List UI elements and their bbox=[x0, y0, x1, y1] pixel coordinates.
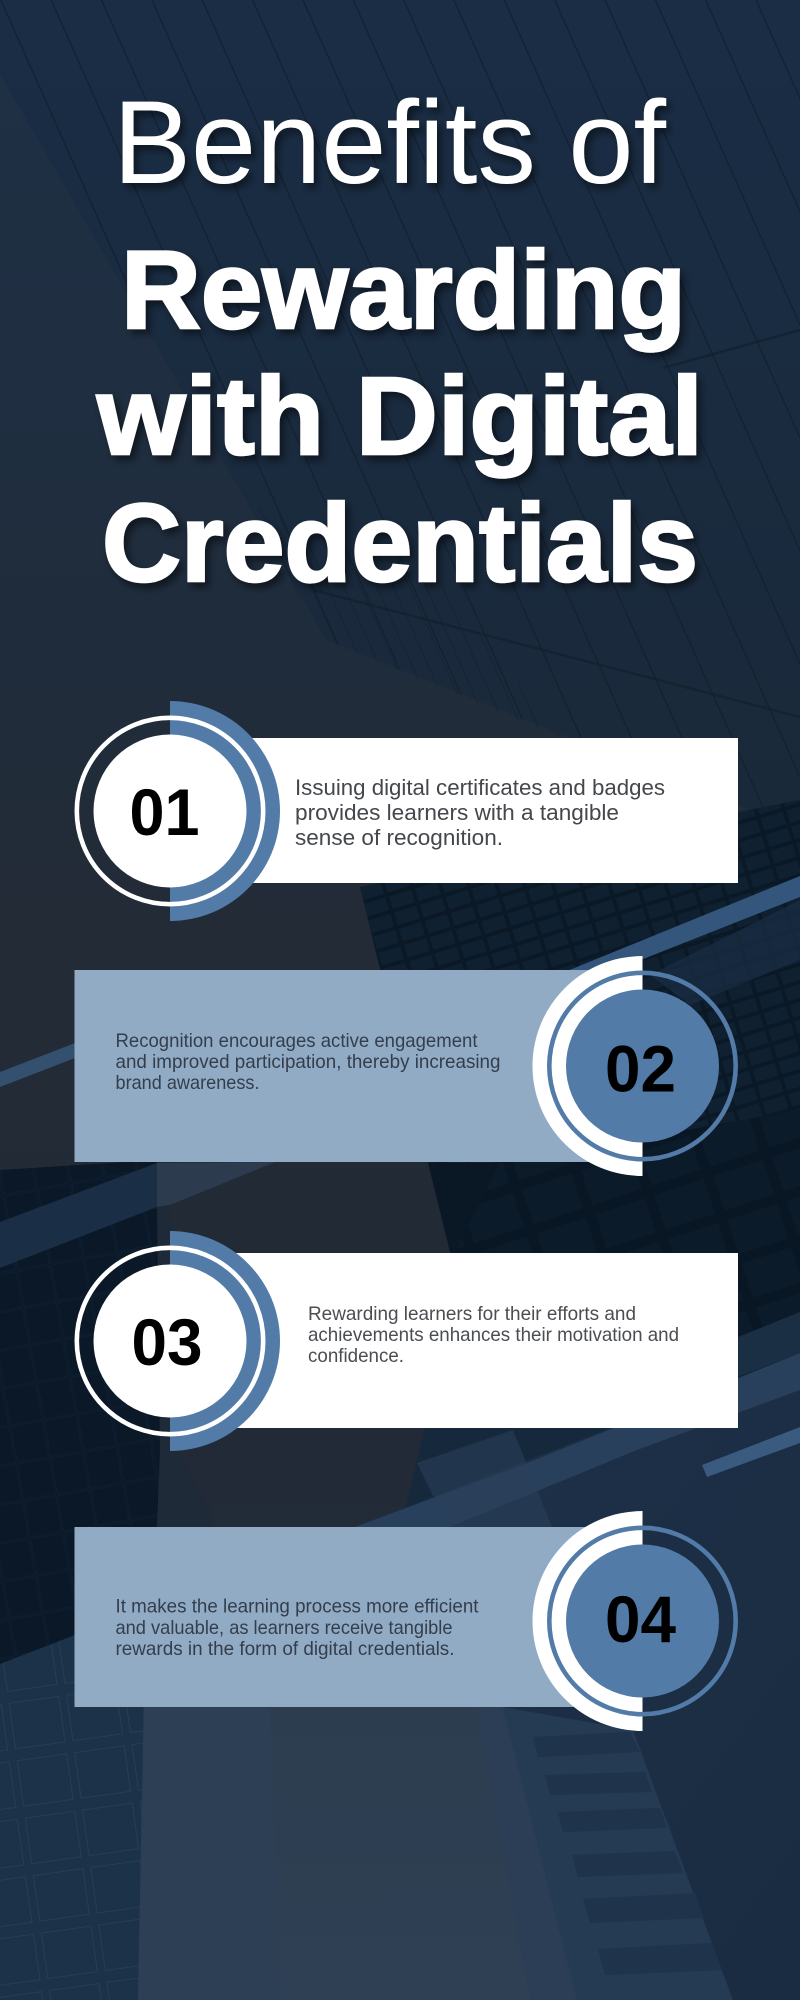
text block 01: Issuing digital certificates and badges bbox=[295, 775, 665, 800]
title line: Credentials: Credentials bbox=[102, 482, 698, 605]
text block 04 bbox=[116, 1596, 479, 1660]
icon: number badge 01 bbox=[77, 701, 280, 921]
icon: number badge 01: 01 bbox=[130, 775, 200, 849]
translucent band over sky bbox=[157, 1162, 275, 1207]
card 01 bbox=[170, 738, 738, 883]
icon: number badge 02: 02 bbox=[605, 1032, 676, 1106]
card 04 bbox=[74, 1527, 642, 1707]
panel: item 03 bbox=[77, 1231, 738, 1451]
title bbox=[96, 77, 703, 605]
title line: Rewarding: Rewarding bbox=[121, 229, 686, 352]
card 02 bbox=[74, 970, 642, 1162]
card 03 bbox=[170, 1253, 738, 1428]
text block 01: provides learners with a tangible bbox=[295, 800, 619, 825]
text block 02 bbox=[116, 1030, 500, 1094]
dark grid tower bbox=[360, 800, 800, 1540]
translucent band left bbox=[0, 1163, 157, 1268]
lower-right glass tower bbox=[355, 1355, 800, 2000]
text block 03 bbox=[308, 1303, 679, 1367]
narrow tower edge bbox=[150, 1205, 215, 1700]
title line: Benefits of: Benefits of bbox=[113, 77, 666, 209]
lighter glass corner right bbox=[650, 900, 800, 1005]
lower-left glass tower bbox=[0, 1635, 280, 2000]
icon: number badge 02 bbox=[532, 956, 736, 1176]
icon: number badge 04 bbox=[532, 1511, 736, 1731]
blue diagonal band left bbox=[0, 1043, 75, 1087]
window tower bottom right bbox=[503, 1707, 733, 2000]
upper glass tower bbox=[0, 0, 800, 830]
mid blue zone beneath panel three bbox=[400, 1428, 800, 1530]
text block 04: and valuable, as learners receive tangible bbox=[116, 1617, 452, 1639]
blue diagonal band right bbox=[545, 876, 800, 980]
text block 03: Rewarding learners for their efforts and bbox=[308, 1303, 636, 1325]
lighter band right bbox=[355, 1353, 800, 1527]
icon: number badge 04: 04 bbox=[605, 1582, 676, 1656]
text block 03: confidence. bbox=[308, 1345, 404, 1367]
panel: item 01 bbox=[77, 701, 738, 921]
text block 01 bbox=[295, 775, 665, 850]
panel: item 02 bbox=[74, 956, 736, 1176]
text block 02: and improved participation, thereby increasing bbox=[116, 1051, 500, 1073]
icon: number badge 03 bbox=[77, 1231, 280, 1451]
text block 04: It makes the learning process more efficient bbox=[116, 1596, 479, 1618]
small blue stripe bbox=[702, 1427, 800, 1477]
text block 04: rewards in the form of digital credentials. bbox=[116, 1638, 454, 1660]
upper right glass strip bbox=[738, 1312, 800, 1377]
text block 03: achievements enhances their motivation and bbox=[308, 1324, 679, 1346]
translucent square overlay bbox=[417, 1430, 553, 1530]
panel: item 04 bbox=[74, 1511, 736, 1731]
icon: number badge 03: 03 bbox=[132, 1305, 202, 1379]
text block 02: Recognition encourages active engagement bbox=[116, 1030, 478, 1052]
text block 01: sense of recognition. bbox=[295, 825, 503, 850]
pale tower beneath panel four bbox=[477, 1707, 577, 2000]
title line: with Digital: with Digital bbox=[96, 355, 703, 478]
text block 02: brand awareness. bbox=[116, 1072, 260, 1094]
lower-left dark tower bbox=[0, 1160, 170, 1664]
